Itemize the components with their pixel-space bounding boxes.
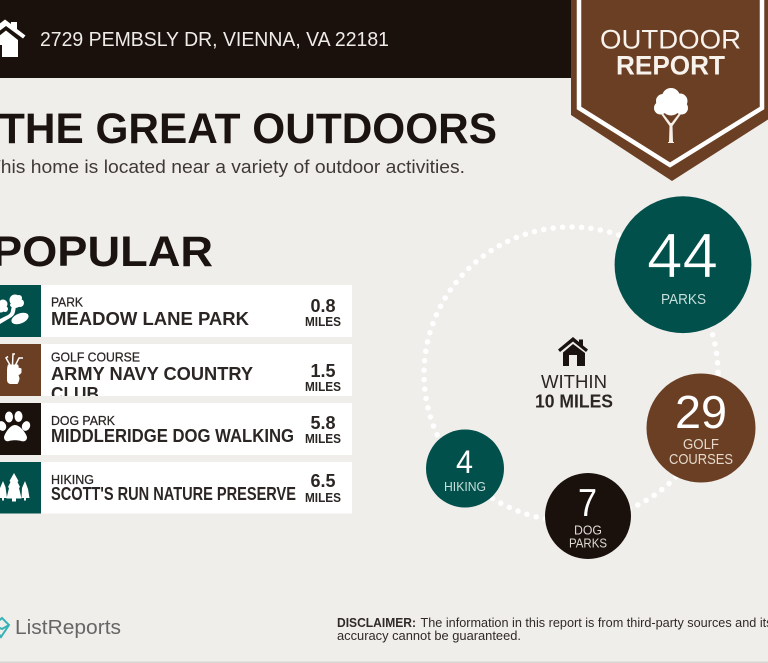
logo mark	[0, 618, 9, 637]
badge: outdoor report	[571, 0, 768, 181]
stat: golf courses: COURSES	[669, 451, 733, 468]
within label: WITHIN	[541, 372, 607, 392]
stat: dog parks: PARKS	[569, 536, 607, 550]
icon: house	[558, 337, 588, 366]
dotted radius ring	[424, 227, 718, 521]
icon: golf bag	[6, 354, 23, 384]
place name: SCOTT'S RUN NATURE PRESERVE	[51, 484, 296, 504]
badge title line 2: REPORT	[616, 50, 725, 80]
label: PARKS	[661, 291, 706, 308]
title: THE GREAT OUTDOORS	[0, 105, 497, 153]
icon: park trees	[0, 294, 30, 327]
address: 2729 PEMBSLY DR, VIENNA, VA 22181	[40, 29, 389, 51]
miles label: MILES	[305, 315, 341, 329]
disclaimer: DISCLAIMER:	[337, 616, 416, 630]
miles label: MILES	[305, 432, 341, 446]
disclaimer: The information in this report is from third-party sources and its	[420, 616, 768, 630]
row: golf course	[0, 344, 352, 396]
logo: ListReports	[0, 616, 121, 639]
category label: GOLF COURSE	[51, 350, 140, 364]
distance: 6.5	[310, 471, 336, 491]
place name	[52, 367, 253, 396]
disclaimer: accuracy cannot be guaranteed.	[337, 629, 521, 643]
place name: CLUB	[51, 384, 99, 404]
stat: hiking	[426, 430, 504, 508]
distance: 5.8	[310, 413, 336, 433]
stat: dog parks	[545, 473, 631, 559]
icon: home	[0, 20, 26, 57]
row: dog park	[0, 403, 352, 455]
badge title line 1: OUTDOOR	[600, 24, 741, 54]
miles label: MILES	[305, 380, 341, 394]
stat: golf courses	[646, 374, 756, 482]
subtitle: This home is located near a variety of outdoor activities.	[0, 156, 465, 177]
icon: paw	[0, 411, 32, 441]
category label: HIKING	[51, 473, 94, 487]
place name: MIDDLERIDGE DOG WALKING	[51, 426, 294, 446]
row: hiking	[0, 462, 352, 514]
place name: MEADOW LANE PARK	[51, 309, 249, 329]
miles label: MILES	[305, 491, 341, 505]
category label: DOG PARK	[51, 414, 116, 428]
icon: pine trees	[0, 473, 30, 502]
disclaimer	[337, 616, 768, 643]
icon: tree	[654, 88, 688, 143]
count: 44	[647, 222, 718, 292]
logo text: ListReports	[15, 616, 121, 639]
distance: 1.5	[310, 361, 336, 381]
category label: PARK	[51, 296, 84, 310]
stat: parks	[615, 196, 751, 333]
count: 29	[675, 386, 727, 438]
header bar	[0, 0, 574, 78]
count: 4	[456, 444, 473, 480]
label: DOG	[574, 522, 602, 538]
label: GOLF	[683, 436, 719, 453]
row: park	[0, 285, 352, 337]
distance label: 10 MILES	[535, 392, 613, 412]
count: 7	[578, 482, 597, 525]
distance: 0.8	[310, 296, 336, 316]
center: within 10 miles	[535, 337, 613, 412]
place name: ARMY NAVY COUNTRY	[51, 364, 253, 384]
label: HIKING	[444, 479, 486, 494]
